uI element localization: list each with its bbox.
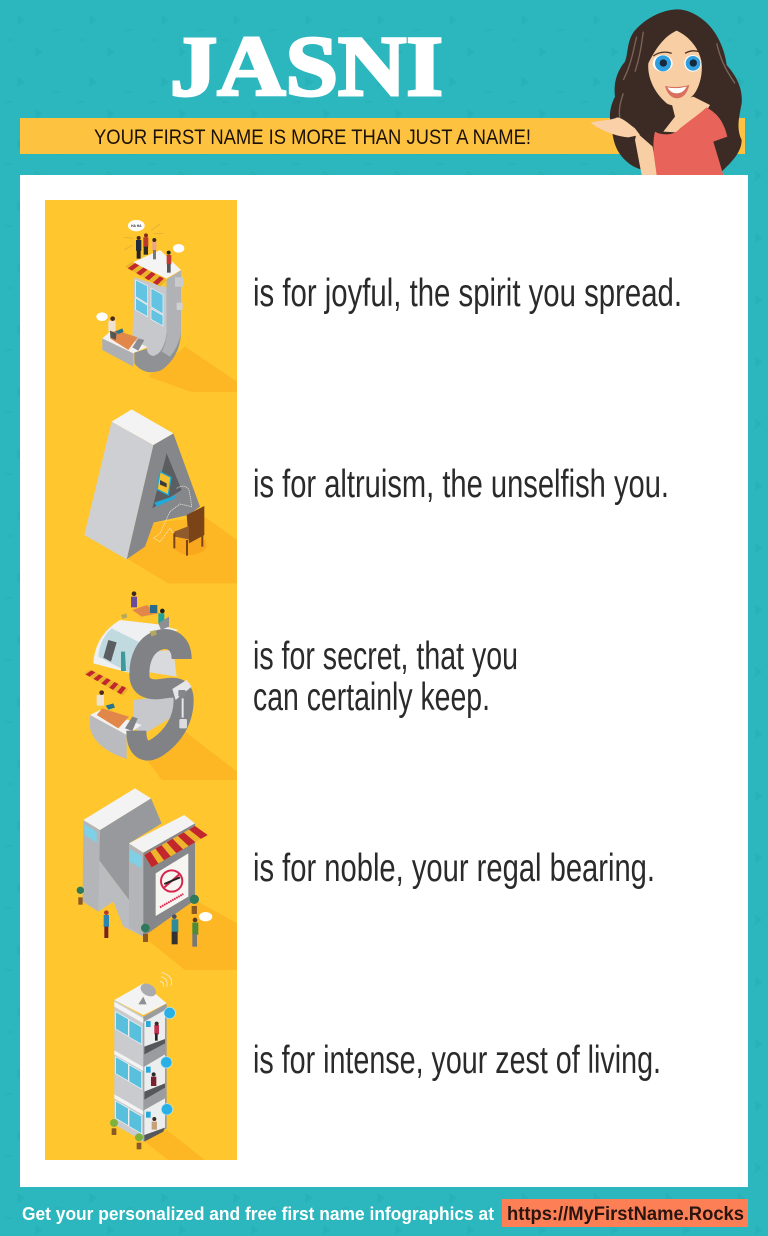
dotted figure: [153, 486, 192, 542]
icon: letter I building: [110, 972, 205, 1160]
panel: white content card: [20, 175, 748, 1187]
awning: [84, 670, 128, 696]
footer: call to action: [22, 1199, 748, 1227]
satellite dish: [138, 972, 172, 1004]
footer: call to action: Get your personalized and free first name infographics at: [22, 1204, 494, 1224]
speech bubbles: [96, 220, 184, 321]
wall units: [175, 277, 183, 310]
no smoking sign: [156, 853, 188, 916]
office workers: [146, 1021, 159, 1130]
people on roof: [136, 233, 171, 273]
text: S line: is for secret, that you: [253, 635, 518, 678]
top desk workers: [121, 591, 169, 636]
potted plants: [77, 887, 199, 942]
icon: cartoon woman mascot: [591, 9, 742, 175]
panel: yellow illustration column: [45, 200, 237, 1160]
pedestrians: [104, 910, 212, 947]
awning: [125, 262, 167, 287]
S letter face: [136, 639, 184, 751]
potted plants: [110, 1119, 143, 1149]
smile: [665, 85, 689, 98]
chair: [173, 506, 207, 556]
awning: [144, 826, 208, 867]
windows: [136, 280, 163, 326]
speech bubbles: HA HA: [131, 224, 142, 228]
desk worker: [108, 316, 144, 351]
wall unit: [172, 680, 192, 728]
title: JASNI: [170, 18, 443, 114]
eyes: [653, 51, 701, 72]
balconies: [144, 1010, 165, 1142]
text: S line: [253, 635, 518, 719]
banner: tagline strip: [20, 118, 745, 154]
text: S line: can certainly keep.: [253, 676, 490, 719]
lower desk worker: [97, 690, 138, 731]
icon: letter A building: [84, 409, 237, 583]
wifi bubbles: [161, 1007, 175, 1115]
footer: url badge: https://MyFirstName.Rocks: [507, 1204, 744, 1225]
icon: letter J building: [96, 220, 237, 392]
windows: [116, 1012, 142, 1134]
icon: letter S building: [84, 591, 237, 780]
tagline text: YOUR FIRST NAME IS MORE THAN JUST A NAME!: [94, 126, 531, 149]
icon: letter N building: [77, 788, 237, 970]
screen: [154, 472, 177, 507]
